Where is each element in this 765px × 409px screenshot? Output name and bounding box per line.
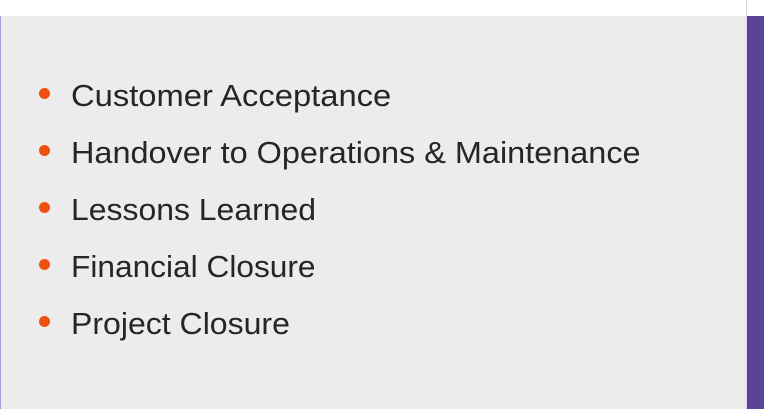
bullet 5	[39, 316, 50, 327]
item: Lessons Learned: Lessons Learned	[71, 192, 316, 227]
right purple bar	[747, 16, 764, 409]
item: Customer Acceptance: Customer Acceptance	[71, 78, 391, 113]
bullet 4	[39, 259, 50, 270]
bullet 3	[39, 202, 50, 213]
list of closing activities	[39, 78, 641, 341]
left border line	[0, 16, 1, 409]
item: Financial Closure: Financial Closure	[71, 249, 316, 284]
bullet 2	[39, 145, 50, 156]
item: Project Closure: Project Closure	[71, 306, 290, 341]
item: Handover: Handover to Operations & Maintenance	[71, 135, 641, 170]
bullet 1	[39, 88, 50, 99]
faint divider beside purple bar	[746, 0, 747, 409]
